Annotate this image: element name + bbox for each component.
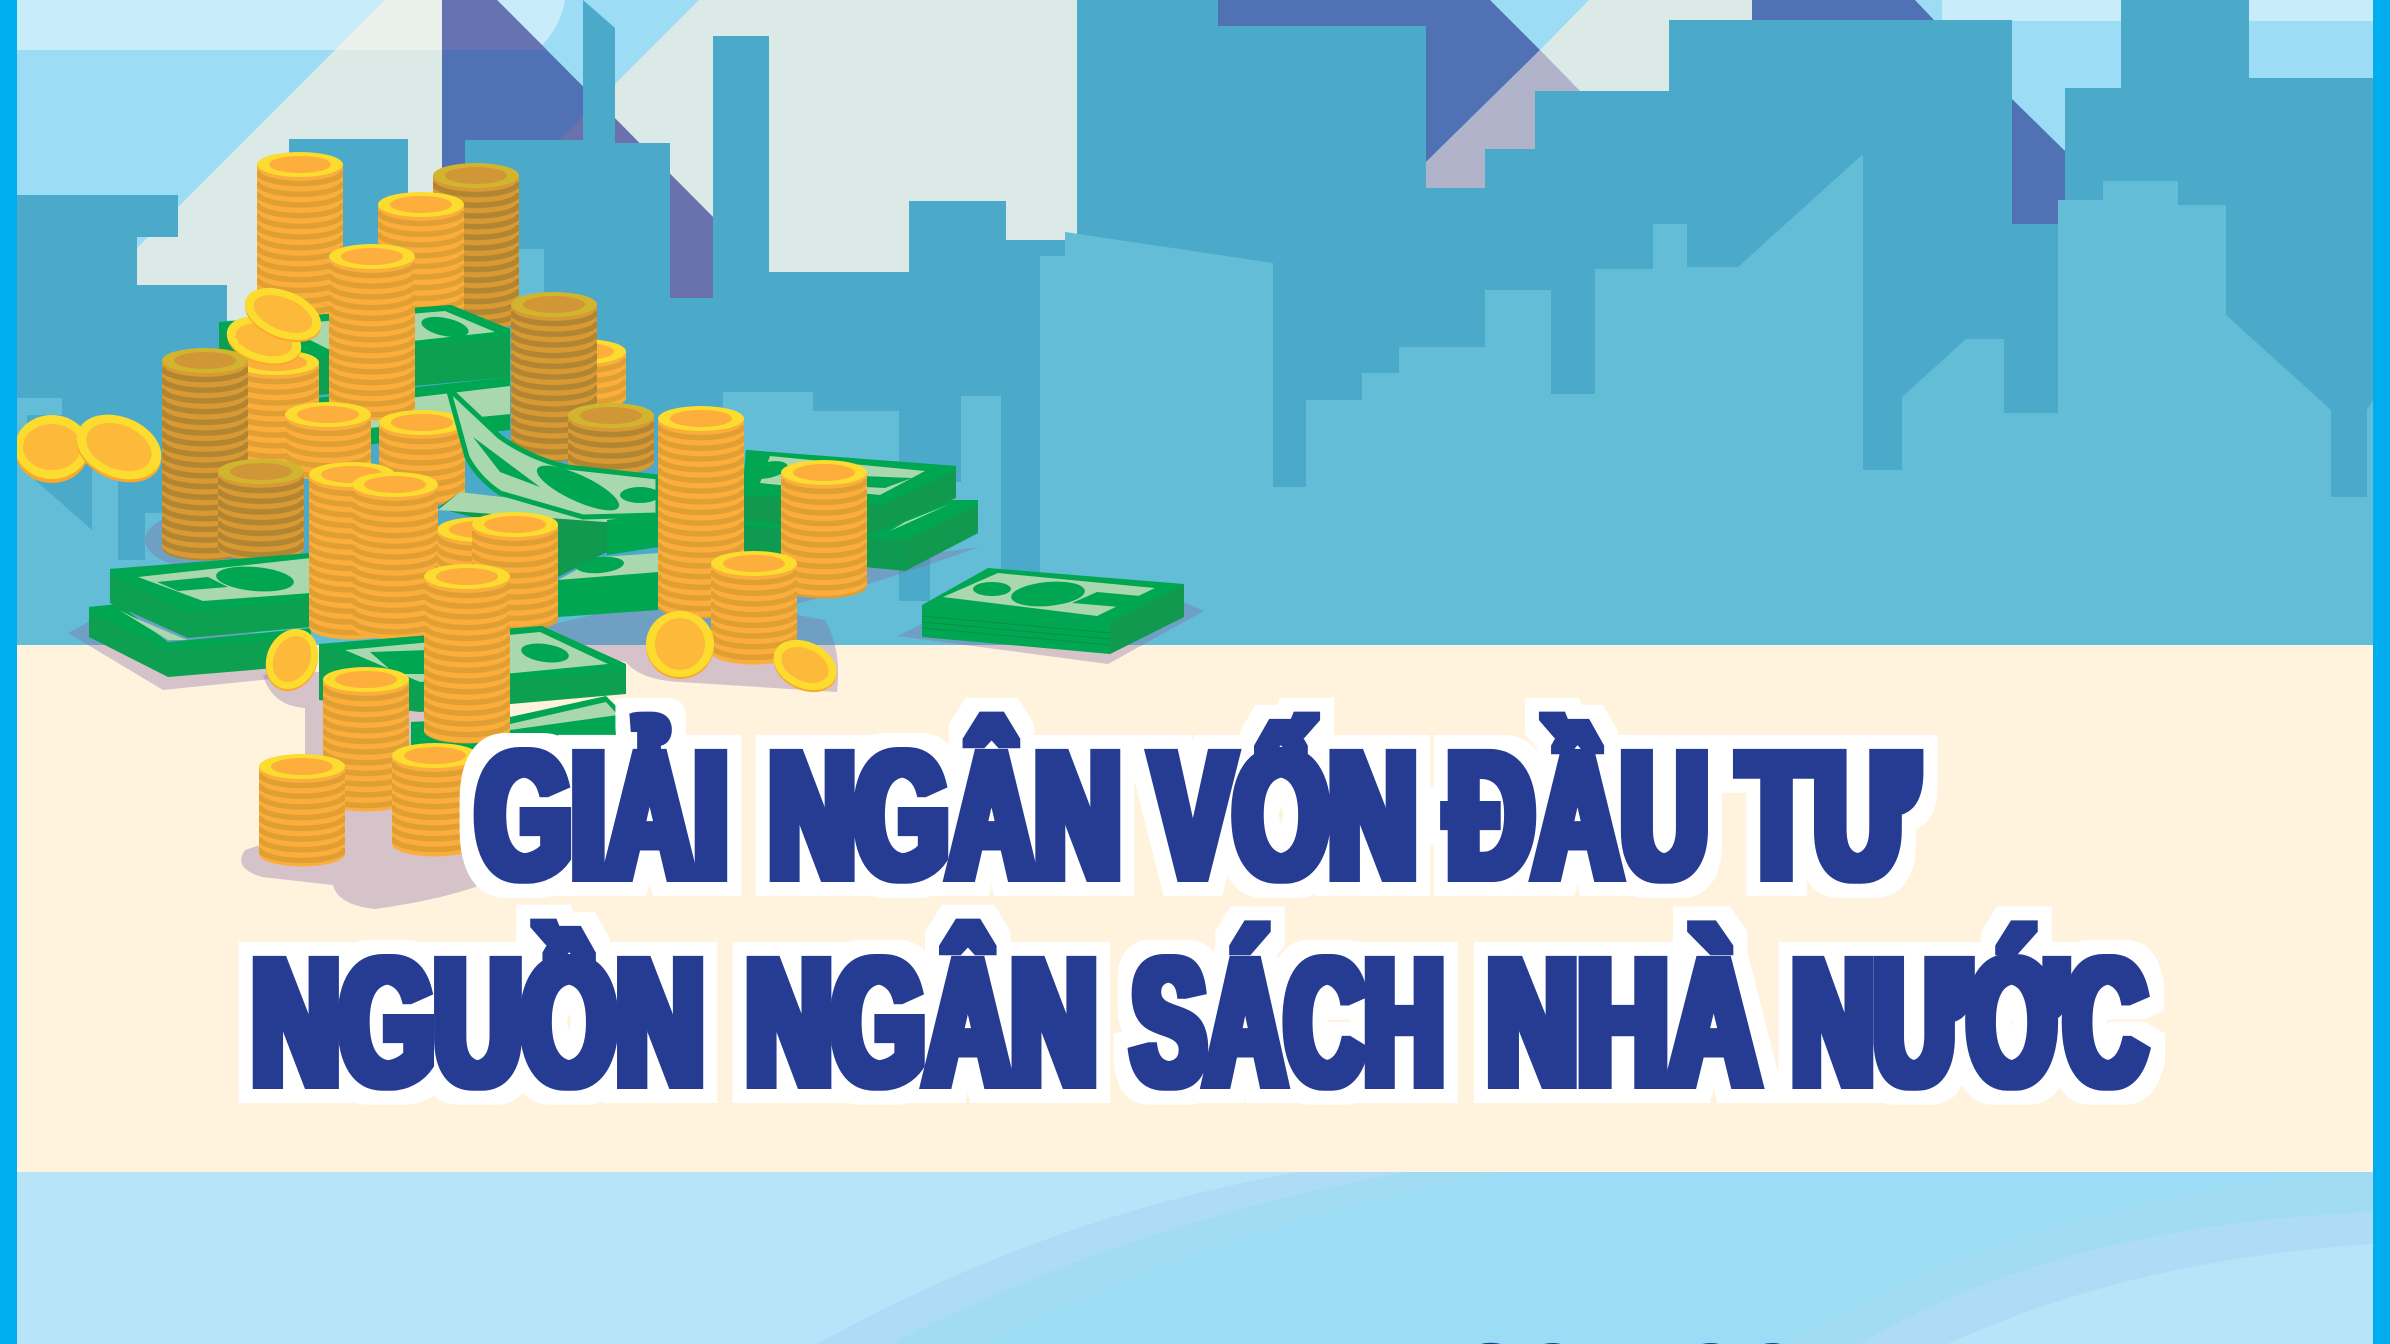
banknotes: left stacks bbox=[89, 553, 311, 677]
background: pale mountains bbox=[137, 0, 1752, 320]
coin stacks: front row centre bbox=[309, 462, 797, 664]
loose coins: upper pair bbox=[222, 278, 329, 373]
title: VỐN bbox=[1152, 715, 1417, 915]
title: NGUỒN bbox=[252, 922, 704, 1122]
background: blue diagonal shapes bbox=[442, 0, 2065, 320]
title: ĐẦU bbox=[1447, 715, 1708, 915]
loose coins: front bbox=[256, 611, 845, 702]
title: NGÂN bbox=[769, 715, 1121, 915]
banknotes: centre stacks bbox=[438, 492, 658, 617]
shadows under the pile bbox=[68, 512, 1204, 909]
title: NƯỚC bbox=[1792, 922, 2146, 1122]
side border: left bbox=[0, 0, 17, 1344]
cut-off numbers at bottom edge bbox=[1460, 1321, 1803, 1344]
side border: right bbox=[2373, 0, 2390, 1344]
coin stacks: middle back bbox=[162, 244, 626, 560]
banknotes: back stacks bbox=[219, 305, 510, 450]
title: SÁCH bbox=[1132, 922, 1444, 1122]
banknote: single stack at right bbox=[922, 568, 1184, 654]
banknotes: lower centre stacks bbox=[319, 626, 630, 752]
banknotes: right stacks bbox=[742, 450, 978, 571]
title: GIẢI bbox=[476, 715, 728, 915]
background: clouds at top bbox=[17, 0, 2373, 50]
coin stacks: front row lower bbox=[259, 564, 510, 866]
title: NGÂN bbox=[746, 922, 1097, 1122]
coin stacks: middle row right bbox=[218, 406, 867, 618]
title: TƯ bbox=[1739, 715, 1916, 915]
loose coins: far left pair bbox=[15, 403, 171, 494]
title: NHÀ bbox=[1487, 922, 1759, 1122]
bottom panel with arcs bbox=[17, 1172, 2373, 1344]
coin stacks: back row bbox=[257, 152, 519, 350]
title bbox=[252, 715, 2146, 1122]
illustration: pile of coins and banknotes bbox=[15, 152, 1204, 909]
coin stacks: front of back row bbox=[285, 402, 654, 506]
banknote: curled note bbox=[448, 388, 660, 519]
cream title band bbox=[17, 645, 2373, 1172]
skyline: near buildings bbox=[17, 154, 2373, 645]
skyline: far buildings bbox=[17, 0, 2373, 645]
